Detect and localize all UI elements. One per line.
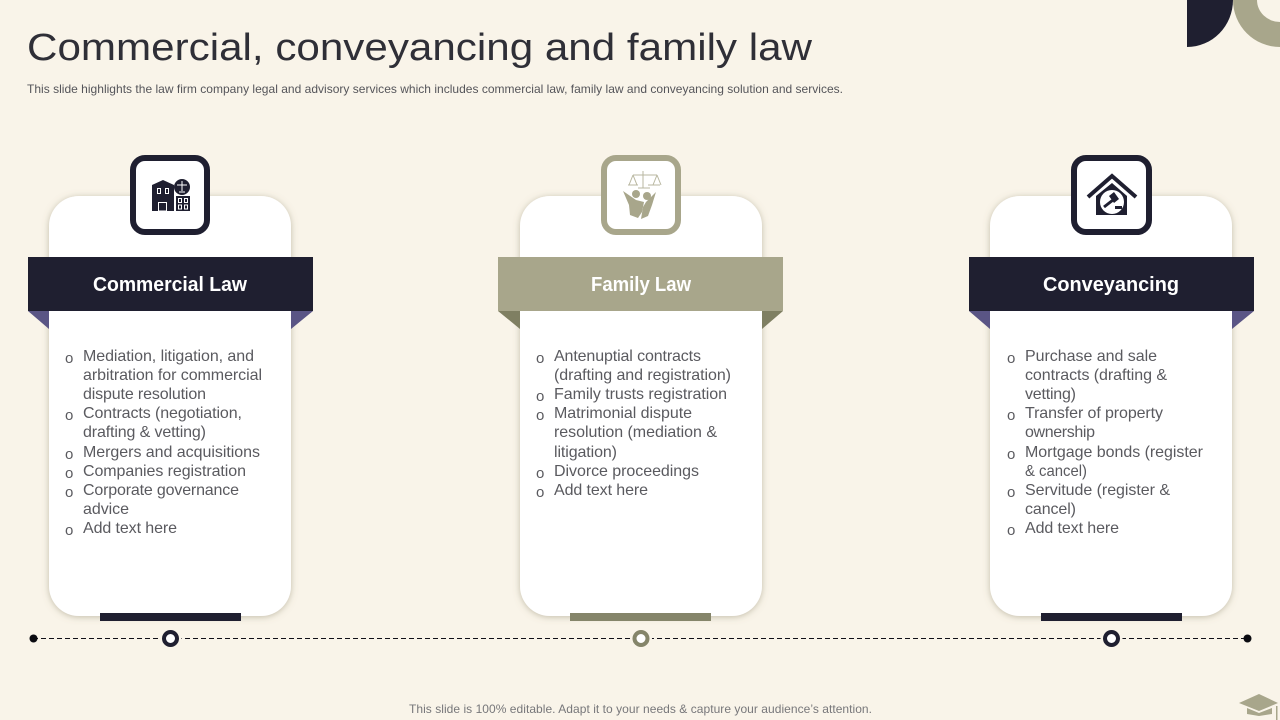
bullet list: o bbox=[65, 407, 73, 424]
ribbon heading: Family Law bbox=[591, 274, 691, 296]
bullet list bbox=[1007, 348, 1204, 539]
bullet list: (drafting and registration) bbox=[554, 367, 731, 384]
bullet list: Antenuptial contracts bbox=[554, 348, 701, 365]
icon: building with scales bbox=[133, 158, 207, 232]
icon: graduation cap bbox=[1239, 694, 1278, 720]
bullet list: o bbox=[1007, 484, 1015, 501]
bullet list: Family trusts registration bbox=[554, 386, 727, 403]
footer note: This slide is 100% editable. Adapt it to your needs & capture your audience’s attention. bbox=[409, 702, 872, 716]
bullet list: Purchase and sale bbox=[1025, 348, 1157, 365]
title: Commercial, conveyancing and family law bbox=[27, 27, 813, 69]
ribbon folds bbox=[969, 311, 1254, 329]
bullet list: ownership bbox=[1025, 424, 1095, 441]
card bottom bar bbox=[100, 613, 241, 621]
bullet list: drafting & vetting) bbox=[83, 424, 206, 441]
bullet list: Matrimonial dispute bbox=[554, 405, 692, 422]
bullet list: o bbox=[536, 465, 544, 482]
bullet list: o bbox=[1007, 522, 1015, 539]
panel: conveyancing bbox=[969, 158, 1254, 621]
bullet list bbox=[65, 348, 262, 539]
panel: commercial law bbox=[28, 158, 313, 621]
bullet list: & cancel) bbox=[1025, 463, 1087, 480]
timeline bbox=[30, 628, 1252, 650]
bullet list: Transfer of property bbox=[1025, 405, 1163, 422]
bullet list: Add text here bbox=[83, 520, 177, 537]
bullet list: vetting) bbox=[1025, 386, 1076, 403]
card bbox=[520, 196, 762, 616]
ribbon heading: Conveyancing bbox=[1043, 274, 1179, 296]
bullet list: Mediation, litigation, and bbox=[83, 348, 254, 365]
bullet list: o bbox=[65, 484, 73, 501]
bullet list: o bbox=[536, 484, 544, 501]
ribbon heading bbox=[28, 257, 313, 311]
bullet list: Add text here bbox=[554, 482, 648, 499]
panel: family law bbox=[498, 158, 783, 621]
bullet list: litigation) bbox=[554, 444, 617, 461]
bullet list: o bbox=[1007, 407, 1015, 424]
icon: house with gavel bbox=[1074, 158, 1149, 232]
bullet list: arbitration for commercial bbox=[83, 367, 262, 384]
ribbon heading: Commercial Law bbox=[93, 274, 247, 296]
bullet list: Divorce proceedings bbox=[554, 463, 699, 480]
bullet list: cancel) bbox=[1025, 501, 1076, 518]
ribbon heading bbox=[498, 257, 783, 311]
bullet list: contracts (drafting & bbox=[1025, 367, 1167, 384]
bullet list: o bbox=[65, 465, 73, 482]
ribbon folds bbox=[28, 311, 313, 329]
subtitle: This slide highlights the law firm company legal and advisory services which includes commercial law, family law and conveyancing solution and services. bbox=[27, 82, 843, 96]
icon: scales with family bbox=[604, 158, 678, 232]
card bbox=[990, 196, 1232, 616]
bullet list: o bbox=[65, 350, 73, 367]
bullet list: o bbox=[1007, 446, 1015, 463]
bullet list: o bbox=[65, 446, 73, 463]
card bbox=[49, 196, 291, 616]
bullet list: o bbox=[536, 407, 544, 424]
bullet list: o bbox=[1007, 350, 1015, 367]
bullet list: Mergers and acquisitions bbox=[83, 444, 260, 461]
corner decoration bbox=[1187, 0, 1280, 47]
card bottom bar bbox=[570, 613, 711, 621]
bullet list: Mortgage bonds (register bbox=[1025, 444, 1204, 461]
bullet list: resolution (mediation & bbox=[554, 424, 717, 441]
bullet list: Corporate governance bbox=[83, 482, 239, 499]
bullet list: o bbox=[536, 350, 544, 367]
bullet list: Companies registration bbox=[83, 463, 246, 480]
bullet list bbox=[536, 348, 731, 501]
bullet list: Add text here bbox=[1025, 520, 1119, 537]
bullet list: o bbox=[536, 388, 544, 405]
bullet list: Contracts (negotiation, bbox=[83, 405, 242, 422]
ribbon folds bbox=[498, 311, 783, 329]
bullet list: Servitude (register & bbox=[1025, 482, 1170, 499]
bullet list: dispute resolution bbox=[83, 386, 206, 403]
bullet list: advice bbox=[83, 501, 129, 518]
card bottom bar bbox=[1041, 613, 1182, 621]
bullet list: o bbox=[65, 522, 73, 539]
ribbon heading bbox=[969, 257, 1254, 311]
